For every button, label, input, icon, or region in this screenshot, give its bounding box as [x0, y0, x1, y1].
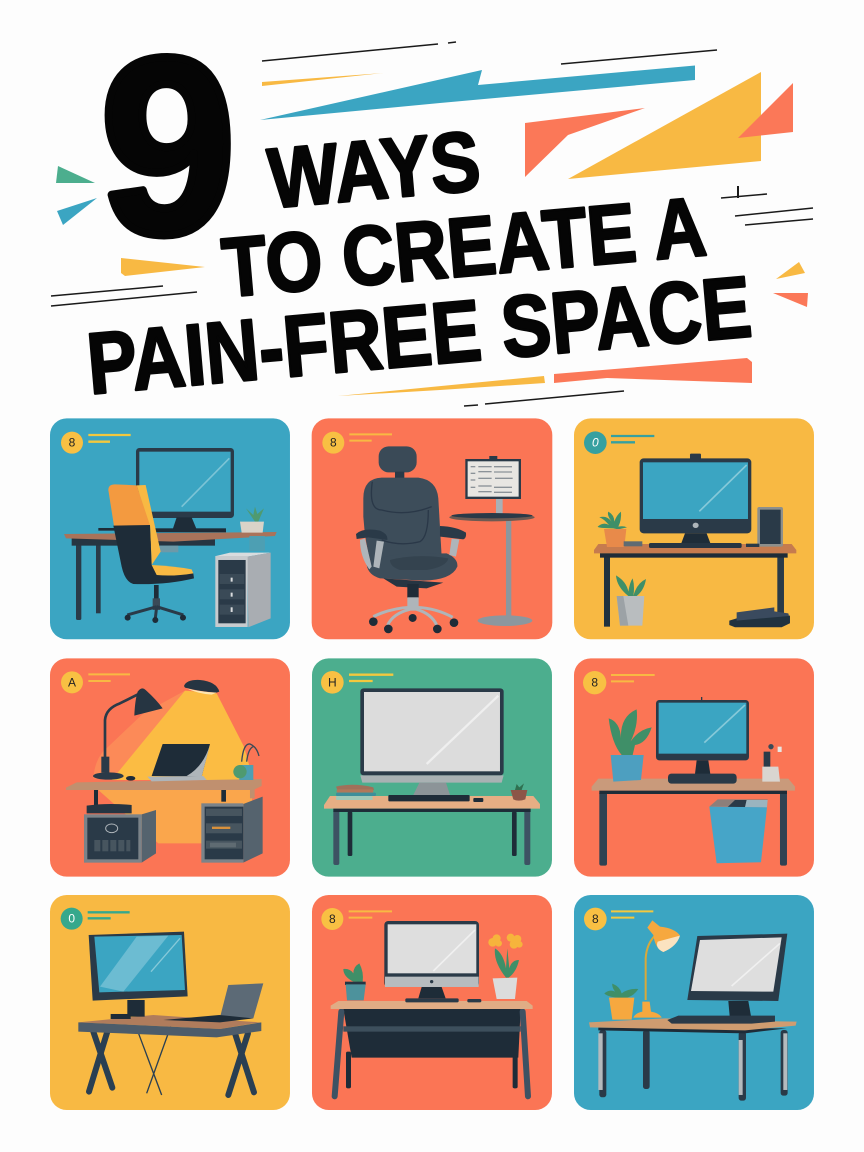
desk lamp 4	[93, 688, 163, 780]
badge 3	[584, 431, 607, 454]
light cone 4	[93, 691, 253, 843]
left drawer unit 4	[84, 804, 156, 863]
chair 1	[108, 484, 194, 623]
title line: TO CREATE A: TO CREATE A	[218, 179, 710, 315]
panel 7: X-leg desk with laptop	[50, 895, 290, 1110]
header lines 9	[611, 911, 653, 918]
header lines 1	[88, 435, 131, 442]
monitor 8	[384, 921, 481, 1002]
desk 5	[324, 796, 540, 865]
header lines 5	[349, 675, 393, 681]
badge 6: 8	[591, 676, 598, 690]
badge 7	[61, 908, 83, 930]
keyboard 9	[667, 1016, 775, 1024]
monitor 6	[656, 697, 749, 784]
panel 3: monitor desk on yellow	[574, 418, 814, 639]
badge 9: 8	[592, 912, 599, 926]
title	[83, 6, 755, 413]
badge 5	[321, 671, 344, 694]
header lines 6	[611, 675, 655, 681]
panel 1: ergonomic desk and chair	[50, 418, 290, 639]
title line: WAYS: WAYS	[264, 114, 484, 227]
badge 3: 0	[592, 436, 599, 450]
monitor 7	[89, 932, 188, 1019]
tower 3	[746, 507, 783, 547]
desk 4	[66, 779, 262, 805]
desk lamp 9	[633, 920, 680, 1018]
laptop 7	[163, 983, 263, 1022]
desk 6	[592, 779, 795, 866]
plant 1	[240, 507, 265, 551]
right drawer unit 4	[201, 797, 263, 863]
panel 8: desk with flowers	[312, 895, 552, 1110]
title line: PAIN-FREE SPACE: PAIN-FREE SPACE	[83, 258, 755, 413]
side table 2	[449, 513, 535, 626]
title numeral 9: 9	[100, 6, 236, 287]
monitor 3	[640, 454, 751, 548]
monitor 9	[687, 934, 787, 1016]
header lines 7	[88, 912, 130, 918]
badge 2: 8	[330, 436, 337, 450]
tool pot 4	[233, 744, 259, 780]
waste bin 6	[709, 799, 768, 863]
header lines 8	[349, 911, 392, 918]
laptop 4	[126, 744, 210, 781]
panel 6: monitor, plant and bin	[574, 658, 814, 877]
plant 9	[604, 984, 638, 1020]
panel 2: high-back chair and side table	[312, 418, 552, 639]
header lines 4	[88, 674, 130, 681]
monitor 2	[465, 456, 521, 514]
plant 6	[609, 709, 652, 782]
books 3	[729, 607, 790, 627]
keyboard 5	[388, 795, 483, 802]
badge 4: A	[68, 675, 76, 689]
desk 9	[589, 1018, 797, 1101]
desk 7	[78, 1015, 261, 1095]
plant 5	[511, 783, 527, 801]
desk 1	[64, 532, 277, 620]
panel 9: desk lamp and angled monitor	[574, 895, 814, 1110]
decorative title accents	[51, 42, 813, 406]
panel 5: large monitor on green	[312, 658, 552, 877]
computer tower 1	[215, 553, 271, 627]
badge 7: 0	[68, 912, 75, 926]
desk 8	[331, 1001, 533, 1096]
badge 9	[584, 908, 607, 930]
badge 8: 8	[329, 912, 336, 926]
badge 5: H	[328, 675, 337, 689]
chair 2	[356, 446, 466, 633]
header lines 2	[349, 434, 392, 441]
desk plant 3	[598, 512, 642, 547]
pen holder 6	[762, 744, 782, 782]
desk 3	[594, 544, 796, 627]
books 5	[336, 785, 376, 800]
overhead lamp 4	[184, 680, 219, 695]
badge 1	[61, 432, 83, 454]
monitor 1	[98, 448, 234, 532]
header lines 3	[611, 436, 654, 442]
panel 4: desk lighting	[50, 658, 290, 877]
plant 8	[343, 963, 366, 1000]
floor plant 3	[616, 575, 646, 626]
badge 6	[583, 671, 606, 694]
monitor 5	[360, 688, 504, 795]
badge 2	[322, 432, 344, 454]
badge 1: 8	[69, 436, 76, 450]
flower vase 8	[488, 934, 523, 999]
badge 8	[321, 908, 343, 930]
badge 4	[61, 671, 83, 693]
